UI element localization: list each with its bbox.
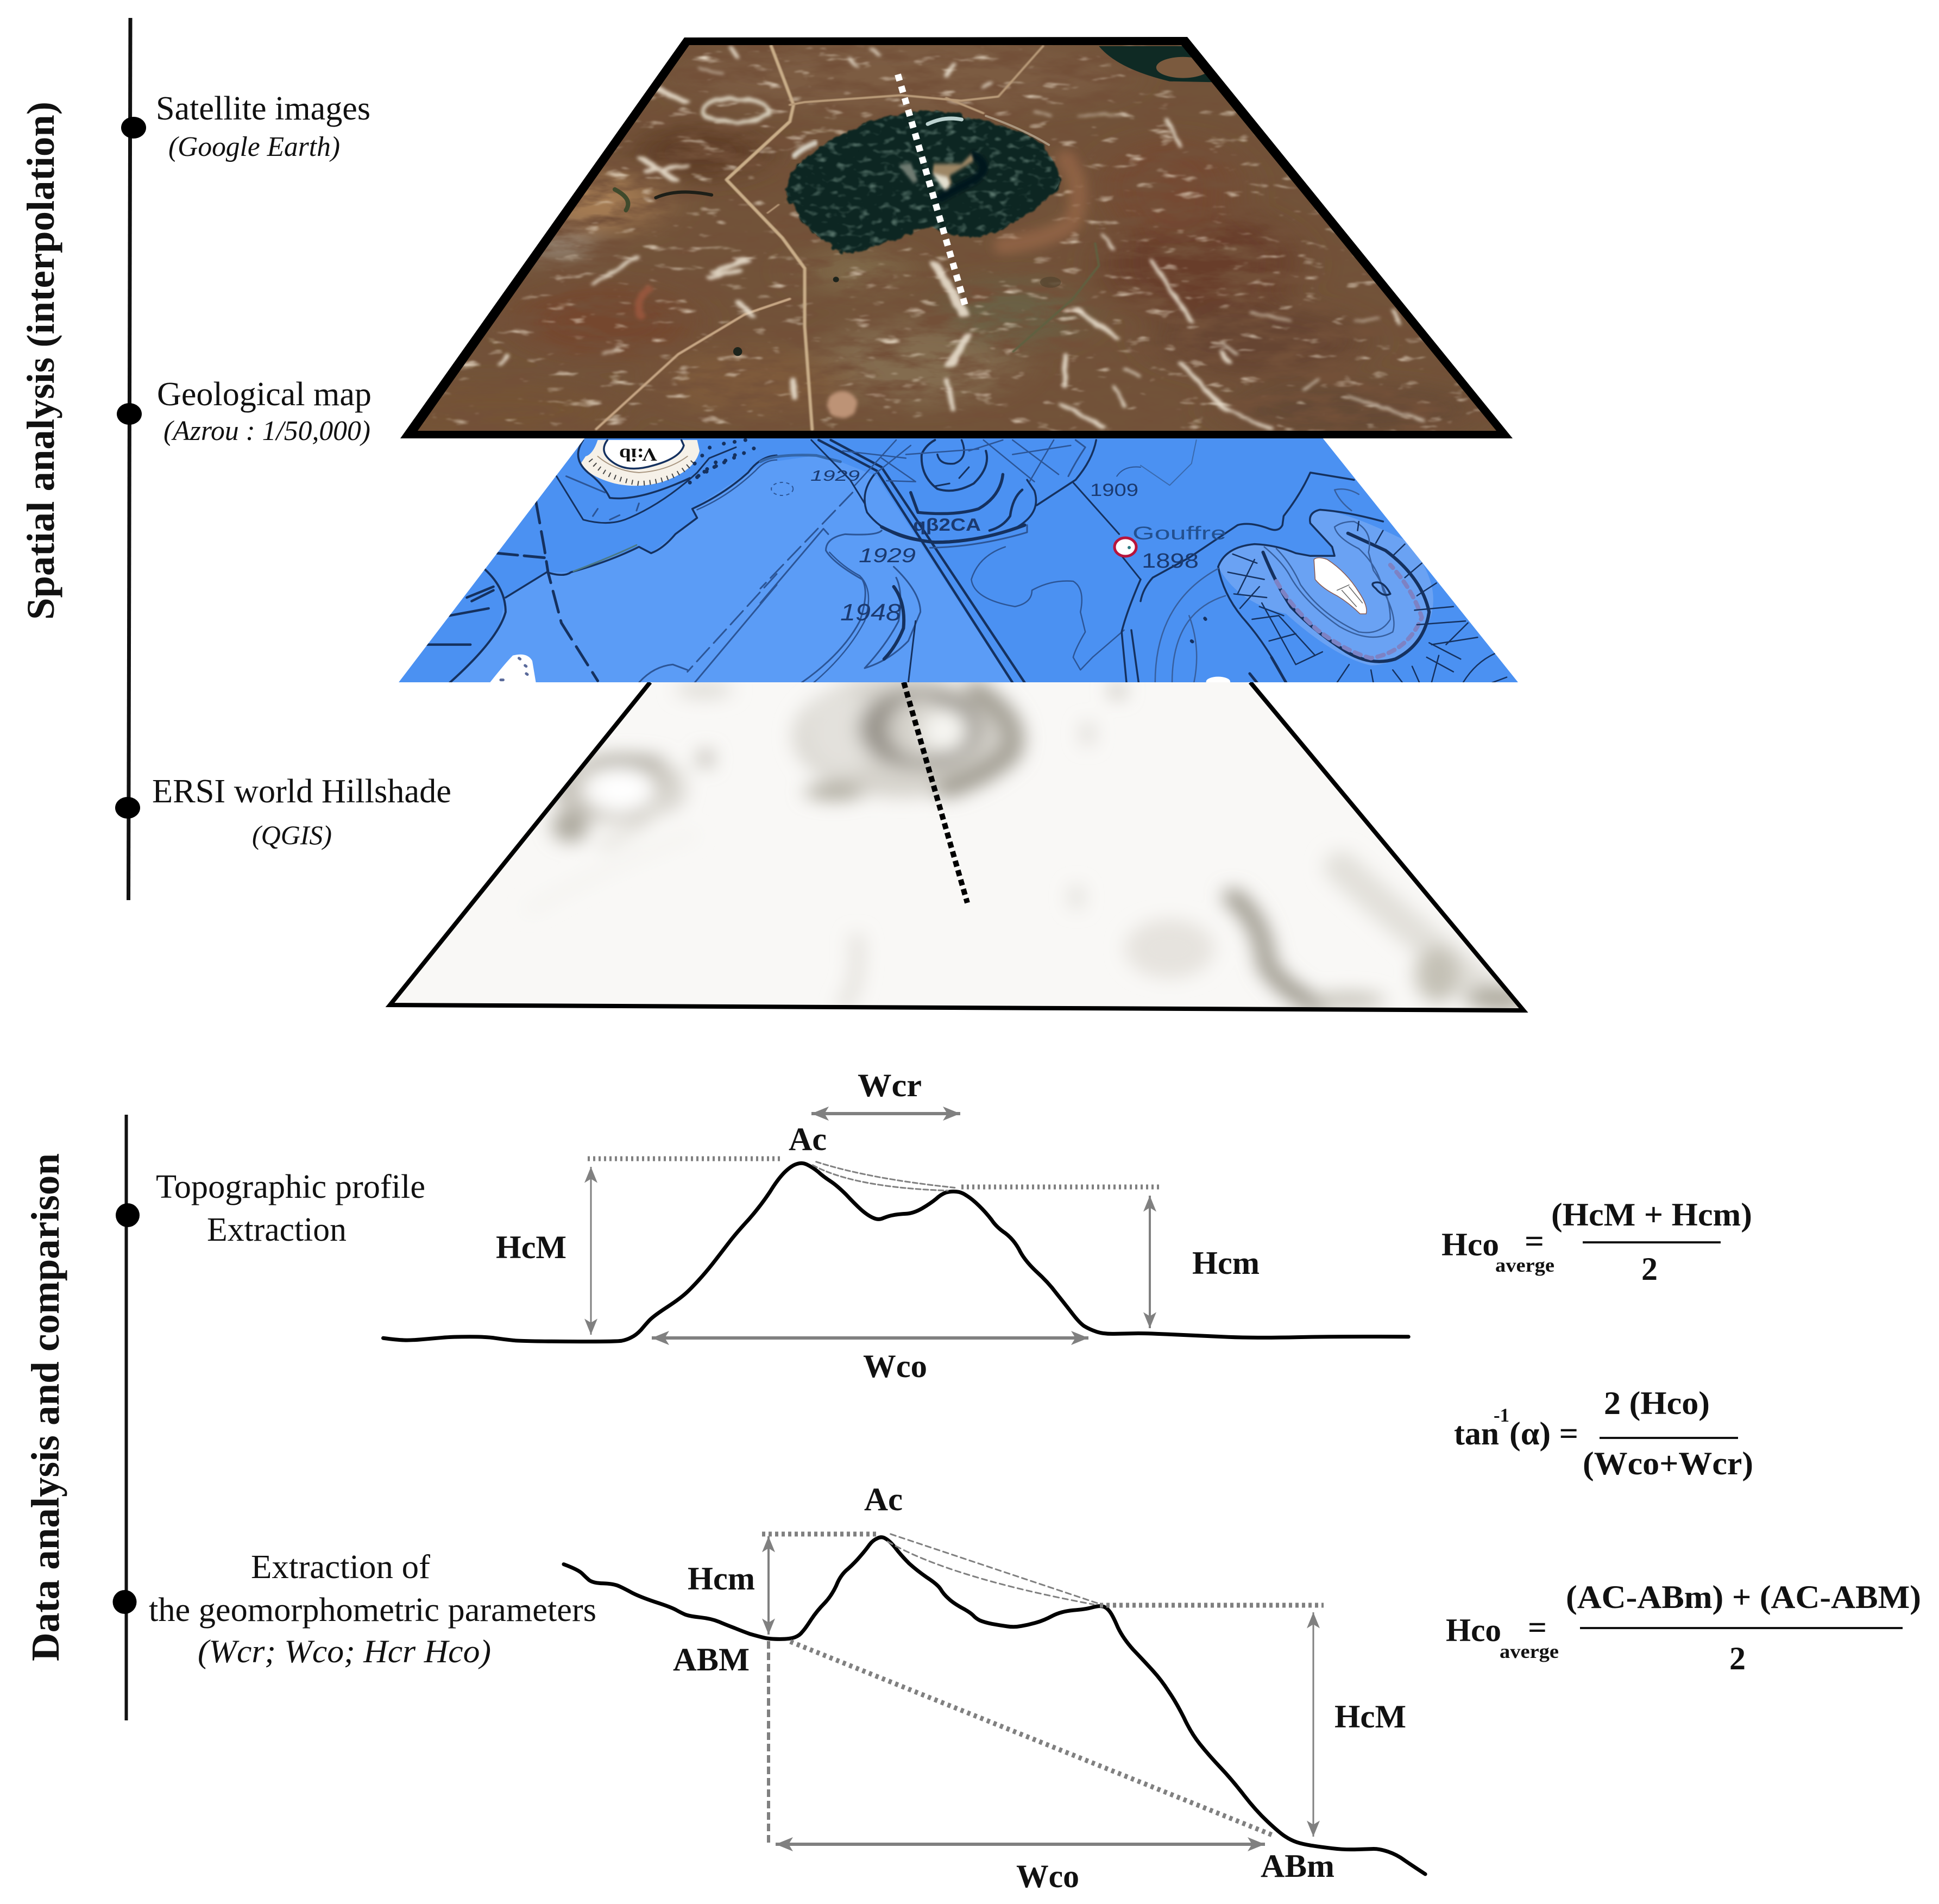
heading: spatial analysis: Spatial analysis (interpolation) [19, 102, 62, 620]
roads and tracks [596, 46, 1099, 429]
satellite imagery [366, 33, 1515, 440]
profile curve [383, 1162, 1408, 1342]
label: parameter list: (Wcr; Wco; Hcr Hco) [198, 1633, 491, 1669]
crater halo [1003, 159, 1078, 246]
label: qgis: (QGIS) [252, 820, 332, 850]
crater rim snow [928, 118, 962, 124]
panel: hillshade layer [389, 675, 1531, 1010]
formula: slope angle: 2 (Hco) [1604, 1385, 1710, 1421]
label: Ac: Ac [789, 1121, 827, 1157]
map field: western lighter ground [450, 455, 1012, 684]
arrow: Wco [776, 1843, 1265, 1846]
label: Wco: Wco [1016, 1858, 1079, 1894]
label: Hcm: Hcm [688, 1561, 755, 1597]
map labels: 1929 [859, 544, 916, 567]
formula: Hco average from AC and AB: averge [1500, 1641, 1559, 1662]
formula: Hco average from AC and AB: 2 [1729, 1641, 1746, 1676]
arrow: Wco [652, 1336, 1088, 1340]
label: geological map: Geological map [157, 376, 372, 413]
hillshade relief shading [529, 675, 1531, 1010]
formula: slope angle: (Wco+Wcr) [1583, 1446, 1753, 1481]
formula: Hco average from HcM and Hcm: Hco [1441, 1227, 1499, 1262]
panel: spatial analysis timeline [115, 18, 451, 900]
map labels: qβ2CA [913, 515, 981, 535]
label: HcM: HcM [1334, 1699, 1406, 1735]
formula: Hco average from HcM and Hcm [1441, 1197, 1752, 1287]
label: geomorphometric parameters: the geomorphometric parameters [149, 1592, 596, 1629]
dotted level lines [588, 1159, 1159, 1187]
timeline dot: parameters [113, 1590, 137, 1614]
timeline dot: geological map [117, 403, 142, 425]
arrow: HcM [1312, 1612, 1314, 1837]
satellite frame [400, 37, 1513, 438]
label: Ac: Ac [864, 1481, 903, 1517]
panel: geological map layer [399, 438, 1518, 687]
timeline axis [128, 18, 130, 900]
crater canopy texture [782, 106, 1065, 258]
map labels: V:ib [619, 444, 657, 464]
map marker: gouffre [1115, 538, 1136, 556]
formula: Hco average from AC and AB: = [1528, 1610, 1547, 1645]
chart: topographic profile 2 [564, 1481, 1425, 1894]
map labels: 1948 [840, 599, 902, 626]
map linework: centre [760, 440, 1141, 683]
formula: Hco average from AC and AB [1446, 1579, 1921, 1676]
label: ABm: ABm [1261, 1848, 1334, 1884]
label: Hcm: Hcm [1192, 1245, 1260, 1281]
formula: Hco average from AC and AB: Hco [1446, 1612, 1501, 1648]
map base [399, 438, 1518, 682]
hillshade border [390, 682, 1523, 1010]
formula: slope angle: (α) = [1509, 1416, 1578, 1451]
formula: Hco average from HcM and Hcm: averge [1495, 1254, 1554, 1276]
label: satellite images: Satellite images [156, 90, 370, 127]
profile line on satellite [898, 74, 965, 305]
top-right forest ring [1099, 46, 1213, 82]
terrain colour patches [366, 41, 1475, 435]
label: google earth: (Google Earth) [168, 131, 340, 162]
label: hillshade: ERSI world Hillshade [152, 773, 451, 810]
crater floor clearing [898, 154, 974, 190]
map linework: west [427, 440, 777, 683]
formula: Hco average from AC and AB: (AC-ABm) + (AC-ABM) [1566, 1579, 1921, 1615]
label: Wcr: Wcr [858, 1067, 922, 1103]
arrow: Hcm [767, 1536, 770, 1635]
formula: slope angle: tan [1454, 1416, 1499, 1451]
hillshade base [389, 682, 1523, 1010]
dashed base projection [767, 1641, 770, 1844]
map labels: Gouffre [1132, 523, 1226, 544]
arrow: HcM [590, 1167, 592, 1335]
dotted base slope [790, 1642, 1274, 1836]
timeline dot: hillshade [115, 797, 140, 819]
timeline dot: profile [116, 1203, 140, 1227]
label: azrou scale: (Azrou : 1/50,000) [163, 416, 370, 447]
arrow: Hcm [1149, 1196, 1151, 1328]
dashed crater rims [813, 1162, 955, 1191]
formula: slope angle [1454, 1385, 1753, 1481]
formula: Hco average from HcM and Hcm: 2 [1641, 1251, 1658, 1287]
map labels: 1909 [1090, 480, 1138, 500]
panel: satellite image layer [366, 33, 1515, 440]
chart: topographic profile 1 [383, 1067, 1408, 1384]
forested crater [786, 110, 1060, 253]
timeline axis [125, 1115, 128, 1720]
label: ABM: ABM [673, 1642, 750, 1677]
heading: data analysis: Data analysis and comparison [23, 1153, 67, 1661]
map labels: 1929 [810, 467, 860, 484]
label: topographic profile: Topographic profile [156, 1168, 425, 1205]
formula: slope angle: -1 [1494, 1404, 1509, 1426]
map linework: eastern volcano [1141, 440, 1507, 687]
profile curve [564, 1534, 1425, 1874]
label: HcM: HcM [496, 1229, 566, 1265]
white rock streaks [499, 47, 1423, 429]
label: extraction of: Extraction of [251, 1549, 430, 1586]
profile line on hillshade [904, 682, 967, 903]
timeline dot: satellite [121, 117, 146, 139]
map labels: 1898 [1142, 550, 1199, 573]
label: Wco: Wco [863, 1348, 927, 1384]
map labels [619, 444, 1226, 626]
ponds and dark spots [615, 46, 1213, 356]
crater inner shadow [941, 156, 984, 197]
label: extraction: Extraction [207, 1211, 347, 1248]
formula: Hco average from HcM and Hcm: = [1525, 1223, 1544, 1259]
dotted level lines [762, 1534, 1324, 1605]
dashed crater rims [887, 1534, 1100, 1605]
formula: Hco average from HcM and Hcm: (HcM + Hcm) [1551, 1197, 1752, 1233]
panel: data analysis timeline [113, 1115, 596, 1720]
arrow: Wcr [811, 1112, 960, 1115]
